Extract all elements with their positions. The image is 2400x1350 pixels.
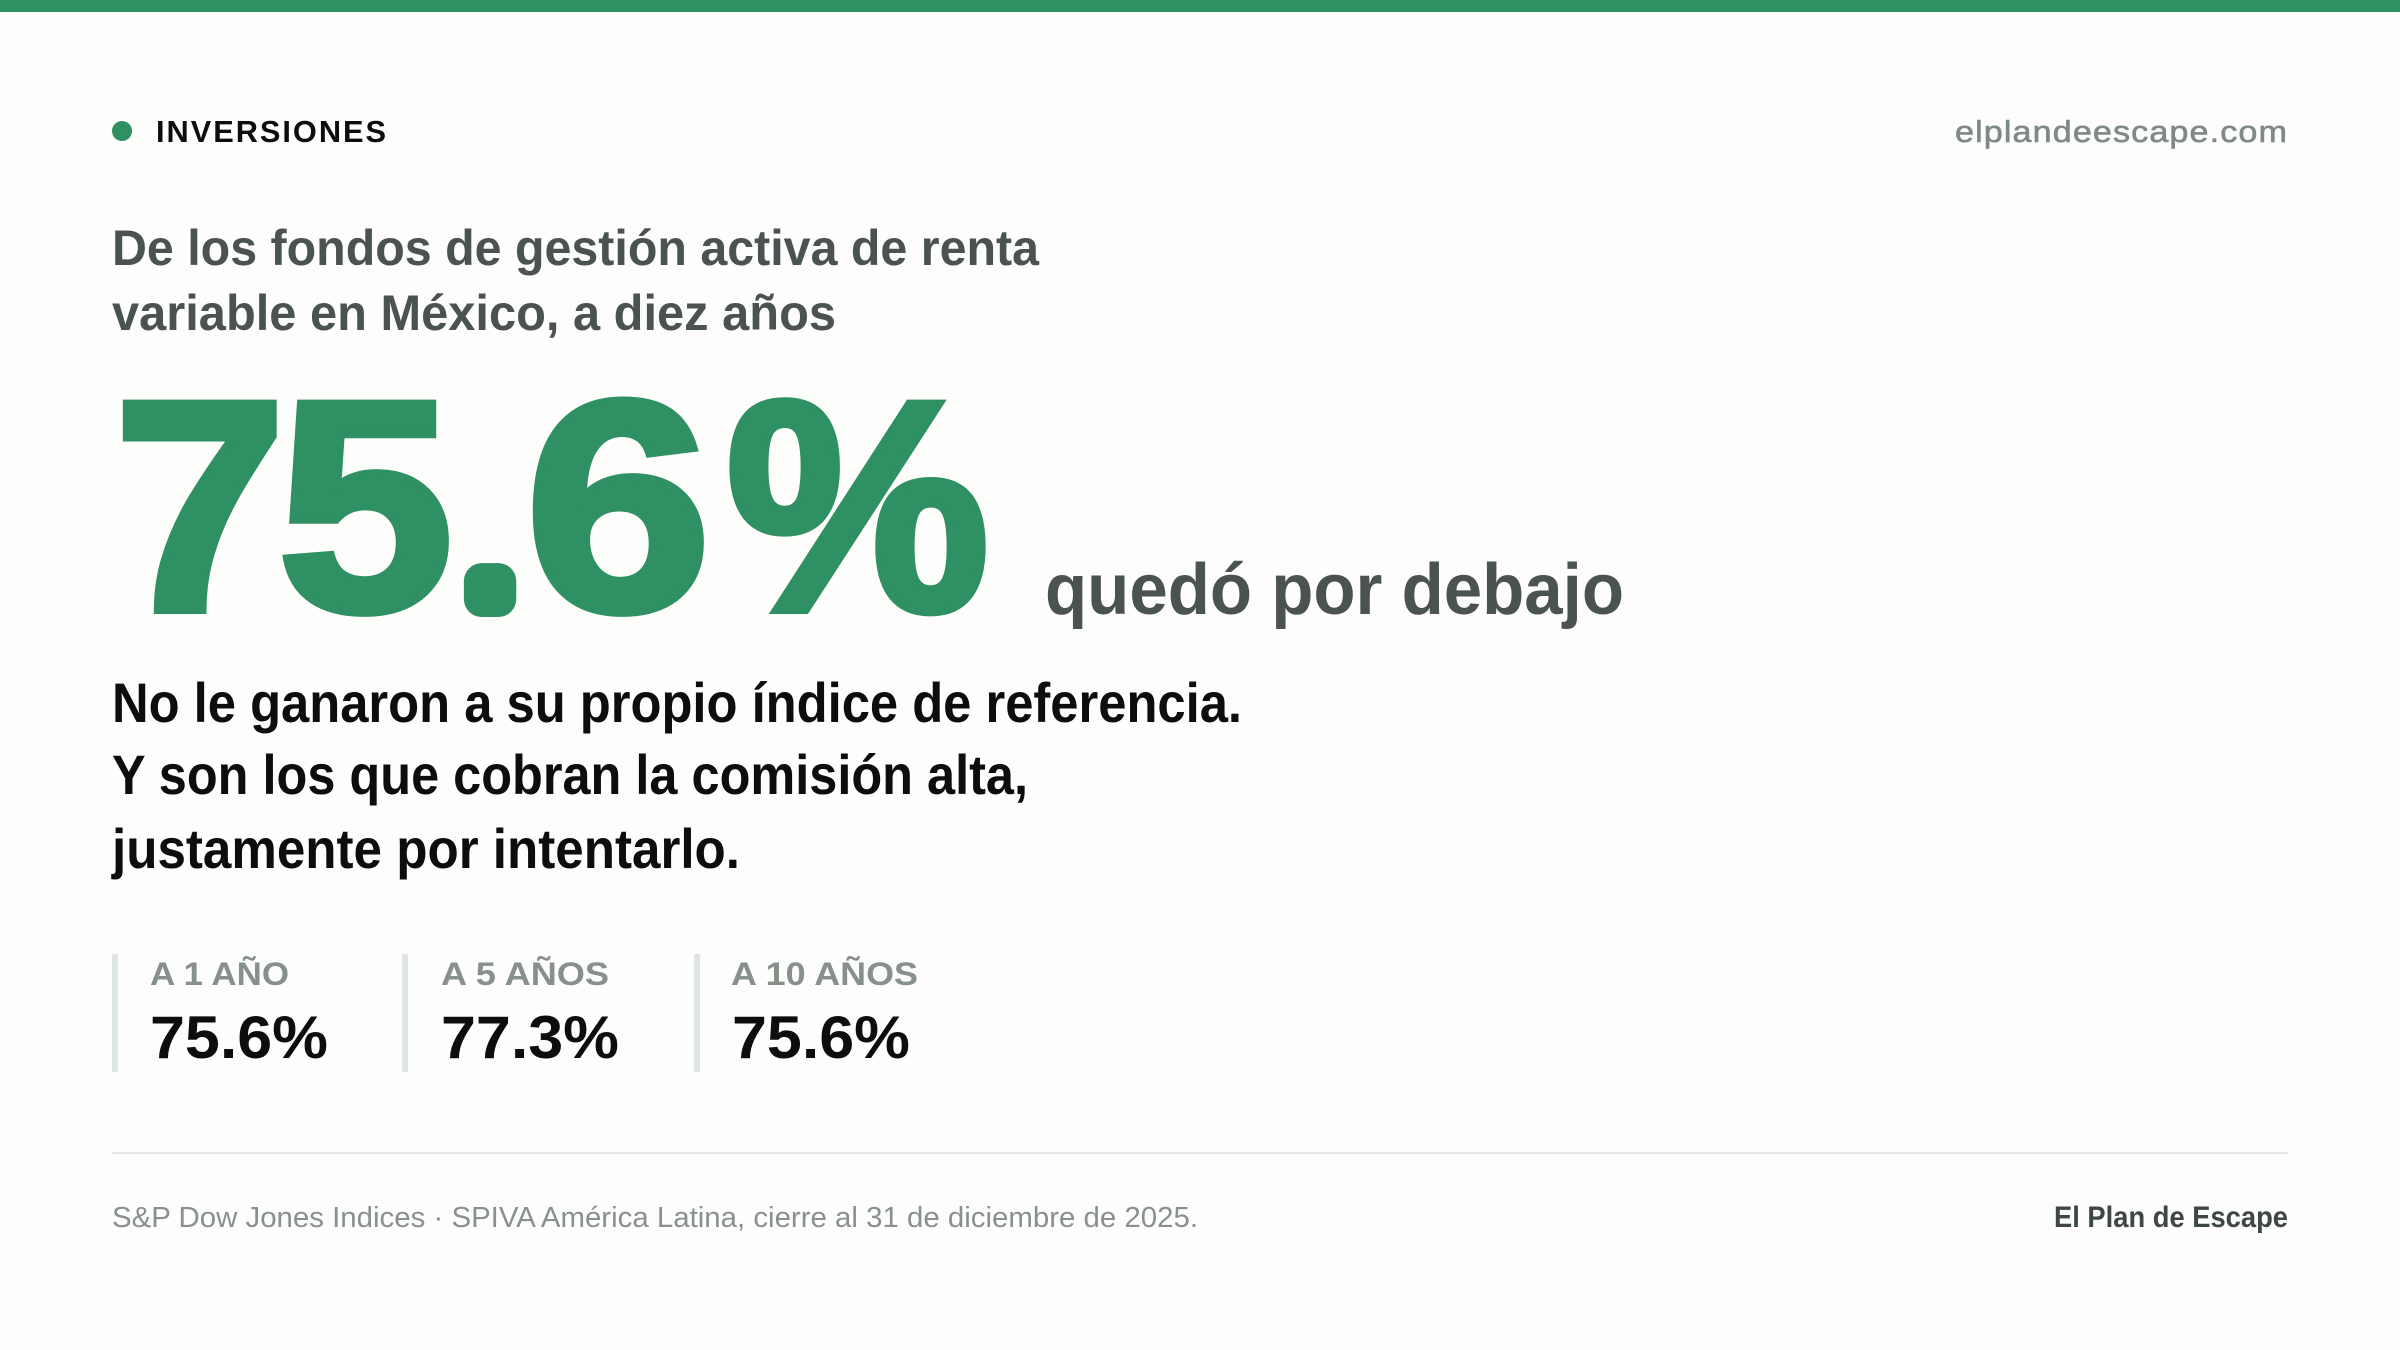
brand signature: El Plan de Escape xyxy=(2054,1201,2288,1234)
category label: INVERSIONES xyxy=(156,114,388,149)
stat: a 10 años: A 10 AÑOS xyxy=(731,956,918,992)
main statement: No le ganaron a su propio índice de referencia. xyxy=(112,671,1242,734)
subtitle: De los fondos de gestión activa de renta xyxy=(112,220,1040,276)
stat: a 5 años: 77.3% xyxy=(441,1004,619,1071)
stat: a 1 año: 75.6% xyxy=(150,1004,328,1071)
subtitle: variable en México, a diez años xyxy=(112,285,836,341)
headline figure xyxy=(114,338,990,674)
stat: a 10 años: 75.6% xyxy=(732,1004,910,1071)
headline figure: % xyxy=(726,338,990,674)
stat: a 5 años xyxy=(402,954,619,1072)
main statement xyxy=(111,671,1242,880)
stat: a 5 años: A 5 AÑOS xyxy=(441,956,609,992)
subtitle xyxy=(112,220,1040,341)
top accent bar xyxy=(0,0,2400,12)
headline figure: 5 xyxy=(278,338,454,674)
main statement: Y son los que cobran la comisión alta, xyxy=(112,743,1028,806)
headline figure: 7 xyxy=(114,338,286,674)
stat: a 10 años xyxy=(694,954,918,1072)
website: elplandeescape.com xyxy=(1955,114,2288,149)
stat: a 1 año xyxy=(112,954,328,1072)
headline qualifier: quedó por debajo xyxy=(1045,550,1624,630)
headline figure: . xyxy=(474,491,507,625)
icon: green dot xyxy=(112,121,132,141)
main statement: justamente por intentarlo. xyxy=(111,817,740,880)
header category tag xyxy=(112,114,388,149)
headline figure: 6 xyxy=(525,338,712,674)
stat: a 1 año: A 1 AÑO xyxy=(150,956,289,992)
source note: S&P Dow Jones Indices · SPIVA América Latina, cierre al 31 de diciembre de 2025. xyxy=(112,1202,1198,1234)
